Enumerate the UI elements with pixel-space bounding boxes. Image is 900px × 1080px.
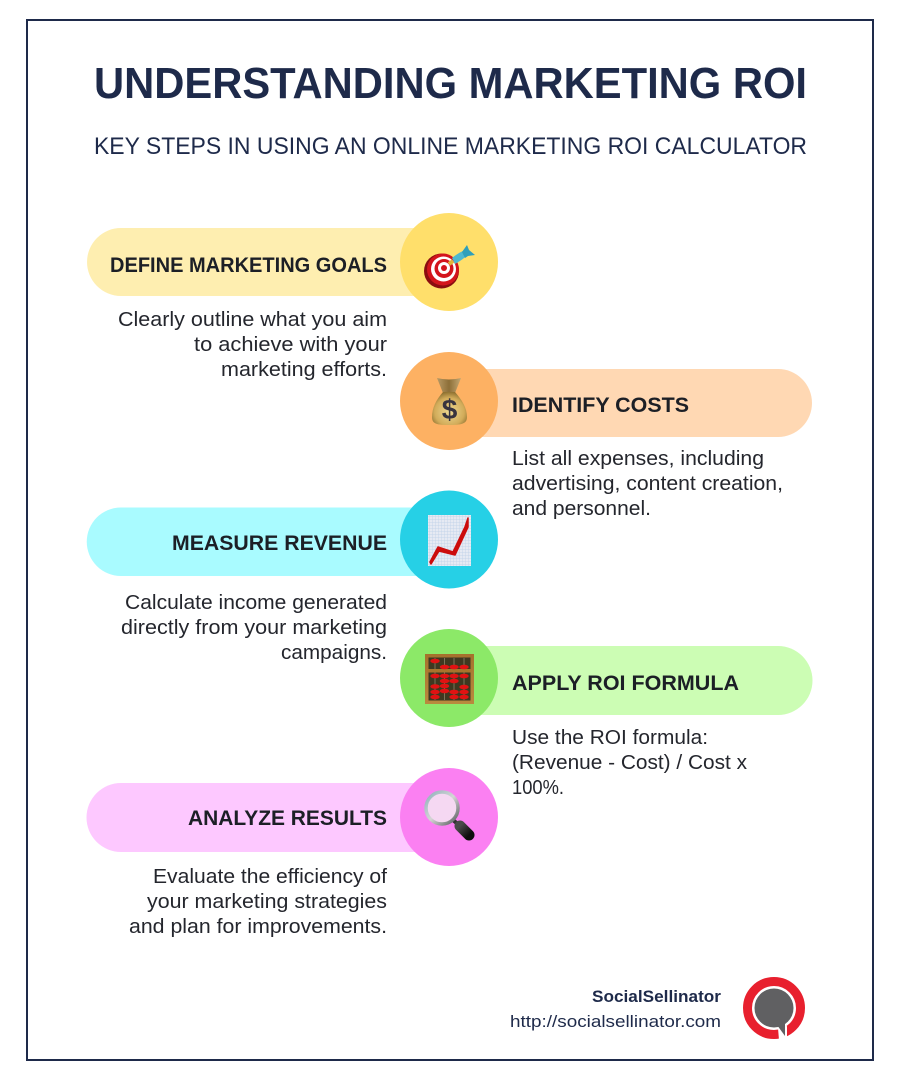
description: apply roi formula: (Revenue - Cost) / Cost x (512, 751, 748, 774)
description: define marketing goals: to achieve with your (194, 333, 387, 356)
pill: analyze results (87, 783, 449, 852)
description: define marketing goals: marketing efforts. (221, 358, 387, 381)
description: apply roi formula (512, 726, 748, 799)
step 2: identify costs (400, 352, 812, 520)
icon circle: pink (400, 768, 498, 866)
footer branding (510, 982, 800, 1040)
label: measure revenue: MEASURE REVENUE (172, 532, 387, 555)
step 3: measure revenue (87, 490, 498, 664)
icon: money bag (432, 378, 467, 425)
step 4: apply roi formula (400, 629, 813, 799)
label: define marketing goals: DEFINE MARKETING GOALS (110, 254, 387, 277)
description: analyze results: Evaluate the efficiency of (153, 865, 387, 888)
icon circle: cyan (400, 490, 498, 588)
logo: speech bubble ring (748, 982, 800, 1040)
step 5: analyze results (87, 768, 498, 938)
label: analyze results: ANALYZE RESULTS (188, 807, 387, 830)
icon circle: orange (400, 352, 498, 450)
description: measure revenue (121, 591, 387, 664)
description: identify costs: advertising, content creation, (512, 472, 783, 495)
subtitle: KEY STEPS IN USING AN ONLINE MARKETING ROI CALCULATOR (94, 133, 807, 160)
description: apply roi formula: Use the ROI formula: (512, 726, 708, 749)
label: identify costs: IDENTIFY COSTS (512, 394, 689, 417)
description: analyze results: and plan for improvements. (129, 915, 387, 938)
icon: money bag: $ (442, 394, 458, 425)
description: analyze results (129, 865, 387, 938)
website url: http://socialsellinator.com (510, 1012, 721, 1031)
description: identify costs: and personnel. (512, 497, 651, 520)
icon: rising chart (428, 515, 471, 566)
description: define marketing goals (118, 308, 387, 381)
pill: identify costs (449, 369, 812, 437)
description: measure revenue: directly from your marketing (121, 616, 387, 639)
pill: measure revenue (87, 508, 449, 576)
description: measure revenue: Calculate income generated (125, 591, 387, 614)
icon circle: green (400, 629, 498, 727)
description: identify costs (512, 447, 783, 520)
description: measure revenue: campaigns. (281, 641, 387, 664)
description: apply roi formula: 100%. (512, 776, 564, 799)
brand name: SocialSellinator (592, 987, 721, 1006)
pill: apply roi formula (449, 646, 813, 715)
pill: define marketing goals (87, 228, 449, 296)
step 1: define marketing goals (87, 213, 498, 381)
icon: magnifying glass (426, 792, 469, 835)
icon: target with dart (424, 245, 475, 288)
description: define marketing goals: Clearly outline what you aim (118, 308, 387, 331)
icon: abacus (425, 654, 474, 704)
description: analyze results: your marketing strategies (147, 890, 387, 913)
icon circle: yellow (400, 213, 498, 311)
title: UNDERSTANDING MARKETING ROI (94, 59, 807, 108)
label: apply roi formula: APPLY ROI FORMULA (512, 672, 739, 695)
description: identify costs: List all expenses, including (512, 447, 764, 470)
